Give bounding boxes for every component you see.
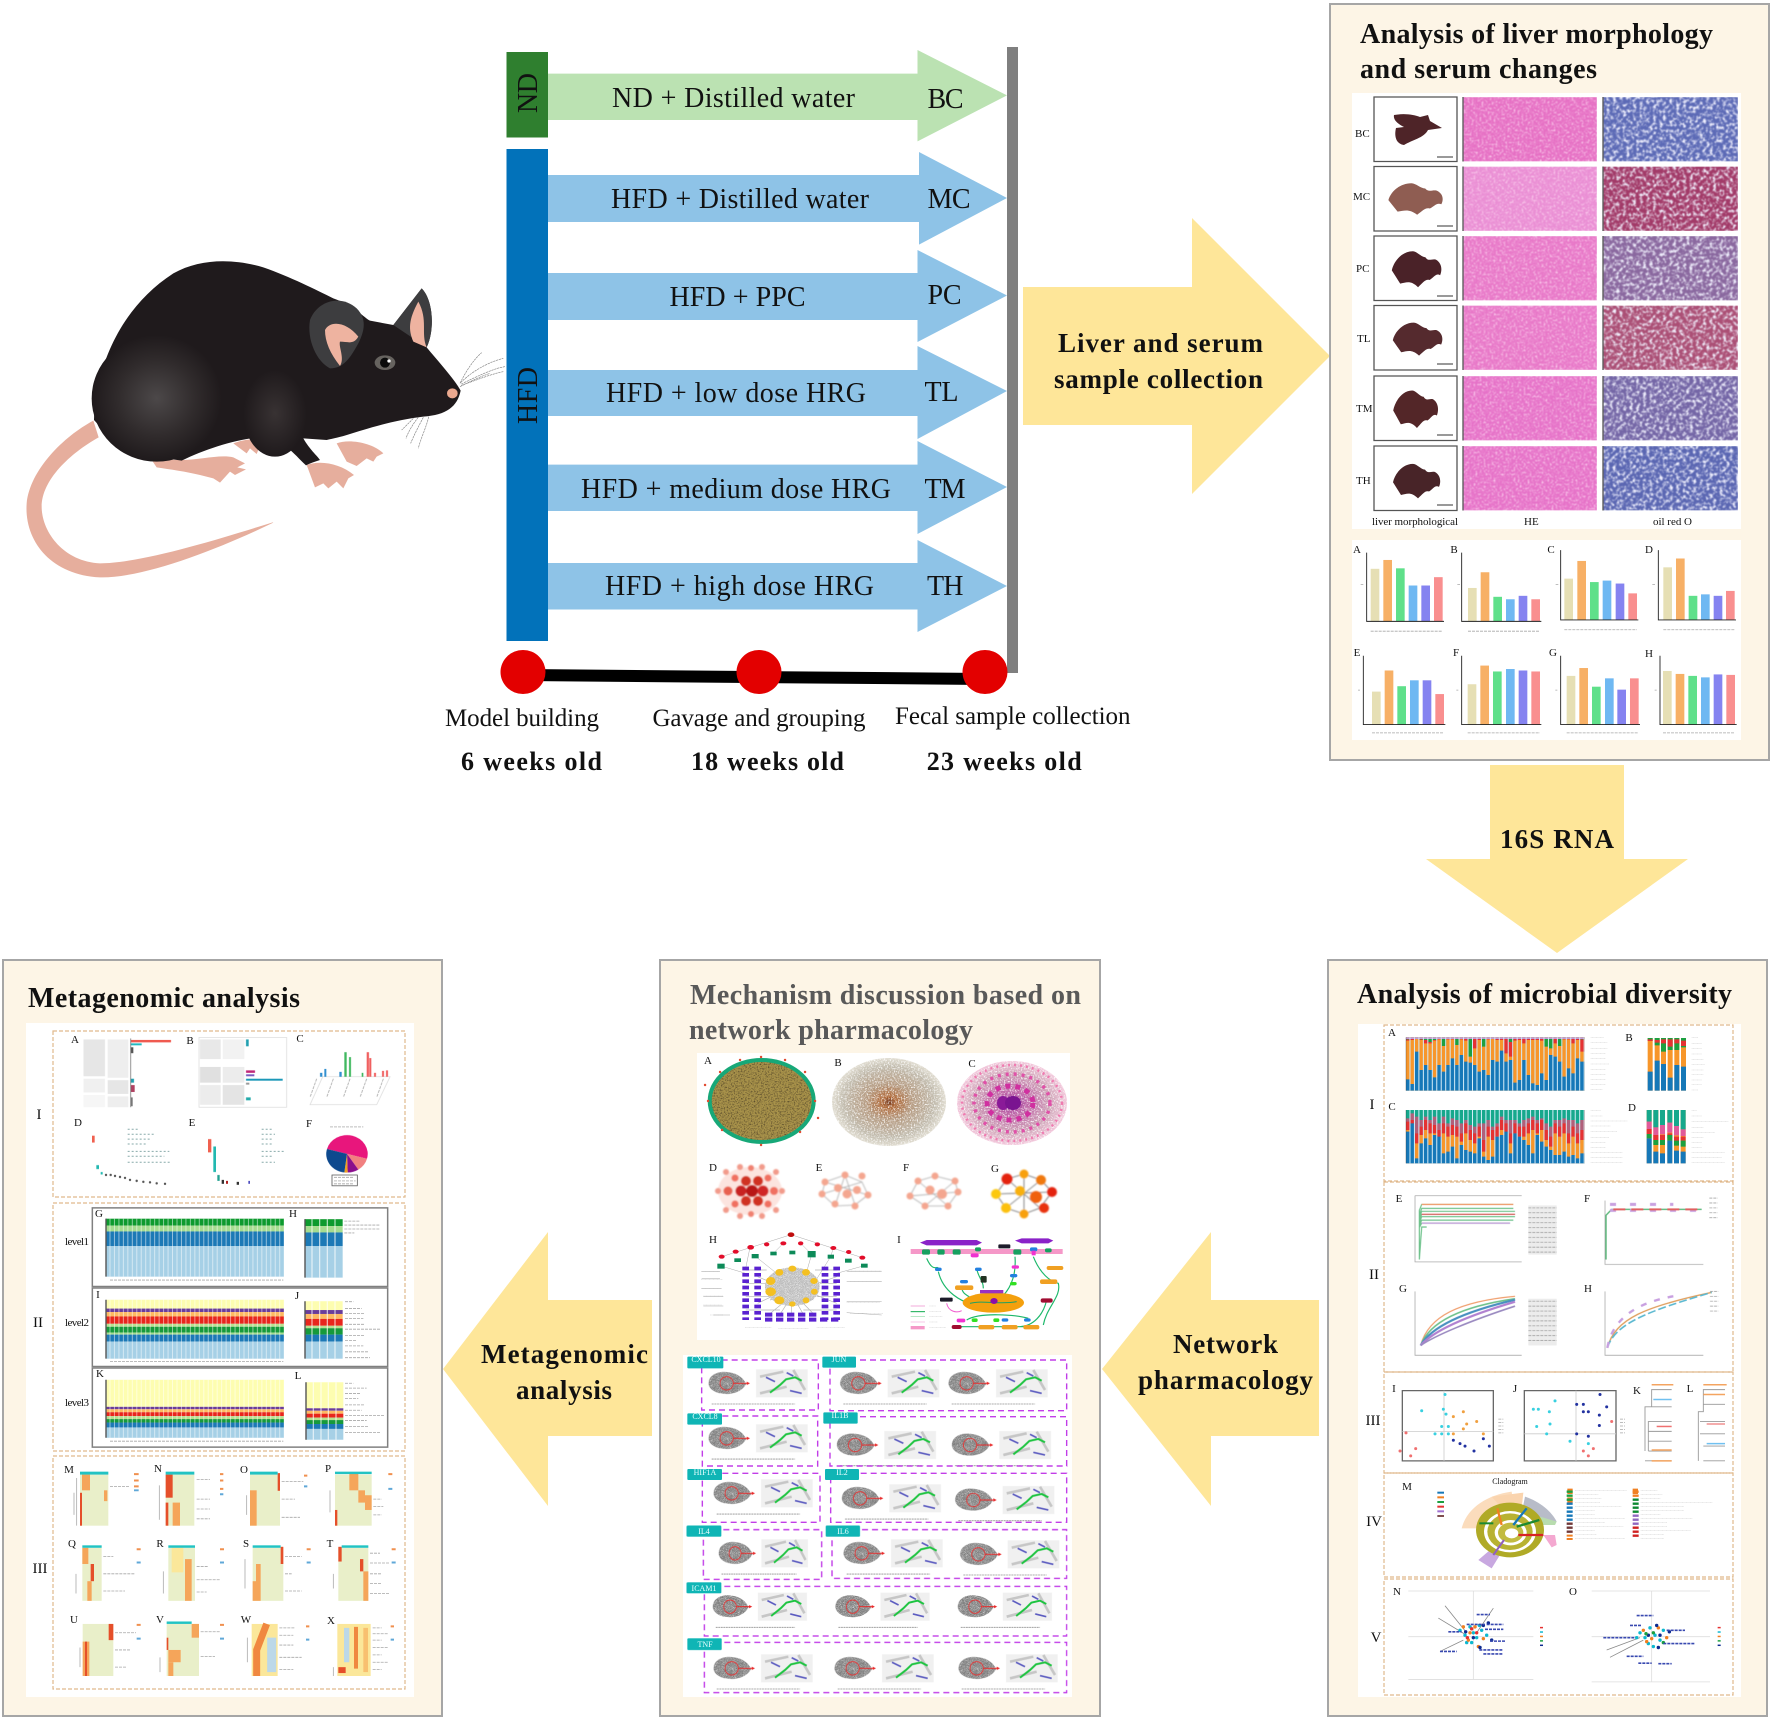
chart letters: microbial panel: L <box>1687 1383 1694 1395</box>
docking target tags rows 1-3: CXCL10 <box>691 1355 721 1364</box>
chart letters: microbial panel: G <box>1399 1283 1407 1295</box>
ordination scatter plots N and O <box>1408 1591 1721 1682</box>
section dividers <box>1384 1025 1733 1695</box>
chart letters: microbial panel: Cladogram <box>1492 1477 1529 1486</box>
chart letters: metagenomic panel: A <box>71 1034 79 1046</box>
heading: network pharmacology panel: network pharmacology <box>689 1015 973 1046</box>
chart letters: B <box>1450 544 1458 556</box>
illustration: black mouse <box>26 261 505 577</box>
arrow: HFD + high dose HRG to TH: TH <box>927 571 964 602</box>
chart letters: metagenomic panel: T <box>327 1538 334 1550</box>
section numerals <box>1366 1097 1382 1646</box>
column labels: oil red O <box>1653 516 1692 528</box>
arrow: Liver and serum sample collection <box>1023 218 1330 494</box>
arrow: 16S RNA <box>1426 765 1688 953</box>
arrow: HFD + medium dose HRG to TM: TM <box>924 474 966 505</box>
KEGG level labels: level1 <box>65 1236 89 1248</box>
histology image grid <box>1352 93 1741 529</box>
KEGG level boxes G to L <box>92 1208 388 1447</box>
section numerals: III <box>32 1561 48 1577</box>
panel: Analysis of microbial diversity <box>1328 960 1767 1716</box>
section numerals: I <box>36 1107 42 1123</box>
chart letters: metagenomic panel: N <box>154 1463 162 1475</box>
network letters: F <box>903 1162 909 1174</box>
section boxes <box>53 1031 405 1689</box>
timeline label: Gavage and grouping: Gavage and grouping <box>652 705 866 732</box>
timeline <box>500 650 1008 694</box>
section numerals: III <box>1366 1413 1380 1429</box>
rarefaction and line charts E to H <box>1415 1196 1720 1355</box>
docking target tags rows 1-3: IL2 <box>836 1468 848 1477</box>
compound-target network H <box>701 1232 883 1328</box>
chart letters: microbial panel: D <box>1628 1102 1636 1114</box>
chart letters: metagenomic panel <box>64 1033 335 1627</box>
chart letters: microbial panel: J <box>1513 1383 1518 1395</box>
arrow: HFD + PPC to PC: PC <box>928 280 962 311</box>
network letters: D <box>709 1162 717 1174</box>
docking target tags rows 1-3: IL1B <box>832 1411 848 1420</box>
docking target tags rows 4-6: IL4 <box>698 1527 710 1536</box>
panel: Mechanism discussion based on network pharmacology <box>660 960 1100 1716</box>
timeline label: Model building: Model building <box>445 705 600 732</box>
chart letters: microbial panel: C <box>1388 1101 1396 1113</box>
chart letters: metagenomic panel: R <box>156 1538 164 1550</box>
chart letters: microbial panel: H <box>1584 1283 1592 1295</box>
arrow: HFD + PPC to PC: HFD + PPC <box>670 282 806 313</box>
signalling pathway diagram I <box>911 1238 1063 1329</box>
chart letters: metagenomic panel: K <box>96 1368 104 1380</box>
row labels: TL <box>1357 333 1371 345</box>
chart letters: metagenomic panel: U <box>70 1614 78 1626</box>
heading: microbial panel: Analysis of microbial diversity <box>1357 979 1732 1010</box>
PCoA scatter plots I and J, dendrograms K and L <box>1400 1385 1727 1461</box>
KEGG level labels: level2 <box>65 1317 89 1329</box>
arrow: Metagenomic analysis: analysis <box>516 1375 612 1405</box>
diet bar: ND: ND <box>513 73 544 113</box>
chart letters: metagenomic panel: V <box>156 1614 164 1626</box>
row labels: MC <box>1353 191 1370 203</box>
chart letters: metagenomic panel: I <box>96 1289 100 1301</box>
arrow: HFD + medium dose HRG to TM: HFD + medium dose HRG <box>581 474 891 505</box>
chart letters: metagenomic panel: L <box>295 1370 302 1382</box>
heatmaps M to X <box>74 1472 396 1676</box>
chart letters: C <box>1547 544 1555 556</box>
chart letters: metagenomic panel: H <box>289 1208 297 1220</box>
section numerals: IV <box>1366 1514 1382 1530</box>
network letters: C <box>968 1058 976 1070</box>
arrow: HFD + PPC to PC <box>548 250 1007 342</box>
chart letters: metagenomic panel: D <box>74 1117 82 1129</box>
timeline label: Fecal sample collection: Fecal sample collection <box>895 703 1131 730</box>
docking target tags rows 1-3: HIF1A <box>694 1468 717 1477</box>
age label: 18 weeks old: 18 weeks old <box>691 747 845 776</box>
arrow: HFD + Distilled water to MC: HFD + Distilled water <box>611 184 870 215</box>
arrow: HFD + high dose HRG to TH <box>548 540 1007 632</box>
molecular docking rows 1-3 <box>687 1357 1067 1522</box>
section numerals: V <box>1371 1630 1382 1646</box>
docking target tags rows 4-6 <box>692 1527 849 1649</box>
chart letters: metagenomic panel: F <box>306 1118 312 1130</box>
chart letters: microbial panel: E <box>1396 1193 1403 1205</box>
endpoint bar <box>1007 47 1018 673</box>
panel: liver morphology and serum changes <box>1330 4 1769 760</box>
column labels: HE <box>1524 516 1539 528</box>
arrow: ND + Distilled water to BC: BC <box>928 84 964 115</box>
row labels: TM <box>1356 403 1373 415</box>
chart letters: metagenomic panel: X <box>327 1615 335 1627</box>
stacked bars A to D <box>1406 1037 1728 1163</box>
arrow: HFD + low dose HRG to TL: TL <box>924 377 958 408</box>
arrow: HFD + Distilled water to MC: MC <box>928 184 970 215</box>
chart letters: metagenomic panel: B <box>186 1035 194 1047</box>
chart letters: D <box>1645 544 1653 556</box>
arrow: HFD + high dose HRG to TH: HFD + high dose HRG <box>605 571 874 602</box>
arrow: 16S RNA: 16S RNA <box>1500 824 1614 854</box>
chart letters: metagenomic panel: E <box>189 1117 196 1129</box>
docking target tags rows 1-3: CXCL8 <box>692 1412 718 1421</box>
arrow: Network pharmacology <box>1102 1232 1319 1506</box>
serum bar charts A to H <box>1352 540 1741 740</box>
docking target tags rows 4-6: ICAM1 <box>692 1584 716 1593</box>
age label: 23 weeks old: 23 weeks old <box>927 747 1082 776</box>
docking target tags rows 1-3 <box>691 1355 848 1477</box>
section numerals: II <box>1369 1267 1379 1283</box>
chart letters: metagenomic panel: G <box>95 1208 103 1220</box>
row labels: PC <box>1356 263 1369 275</box>
heading: network pharmacology panel <box>689 980 1081 1046</box>
chart letters: microbial panel: N <box>1393 1586 1401 1598</box>
chart letters: microbial panel: I <box>1392 1383 1396 1395</box>
network letters: H <box>709 1234 717 1246</box>
chart letters: metagenomic panel: C <box>296 1033 304 1045</box>
column labels <box>1372 516 1692 528</box>
arrow: Network pharmacology: Network <box>1173 1329 1278 1359</box>
network letters: E <box>816 1162 823 1174</box>
network letters: G <box>991 1163 999 1175</box>
chart letters: metagenomic panel: O <box>240 1464 248 1476</box>
arrow: Network pharmacology: pharmacology <box>1138 1365 1314 1395</box>
arrow: HFD + low dose HRG to TL: HFD + low dose HRG <box>606 378 866 409</box>
chart letters: metagenomic panel: P <box>325 1463 331 1475</box>
docking target tags rows 4-6: IL6 <box>837 1527 849 1536</box>
arrow: Liver and serum sample collection: Liver and serum <box>1058 328 1264 358</box>
heading: metagenomic panel: Metagenomic analysis <box>28 983 300 1014</box>
section numerals: II <box>33 1315 43 1331</box>
heading: network pharmacology panel: Mechanism discussion based on <box>690 980 1081 1011</box>
KEGG level labels: level3 <box>65 1397 90 1409</box>
network letters <box>704 1055 999 1246</box>
row labels <box>1353 128 1373 487</box>
age label: 6 weeks old: 6 weeks old <box>461 747 603 776</box>
chart letters: microbial panel: F <box>1584 1193 1590 1205</box>
network letters: A <box>704 1055 712 1067</box>
row labels: BC <box>1355 128 1370 140</box>
diet bar: HFD: HFD <box>513 367 544 424</box>
diet bar: HFD <box>506 149 548 641</box>
cladogram M <box>1437 1489 1712 1568</box>
functional annotation charts A to F <box>83 1037 390 1186</box>
chart letters: metagenomic panel: J <box>295 1290 300 1302</box>
arrow: Metagenomic analysis <box>443 1232 652 1506</box>
arrow: HFD + low dose HRG to TL <box>548 346 1007 439</box>
heading: liver panel: and serum changes <box>1360 54 1597 85</box>
docking target tags rows 1-3: JUN <box>832 1355 847 1364</box>
chart letters: microbial panel: B <box>1625 1032 1633 1044</box>
heading: liver panel: Analysis of liver morphology <box>1360 19 1713 50</box>
molecular docking rows 4-6 <box>687 1526 1067 1693</box>
chart letters: A <box>1353 544 1361 556</box>
chart letters: G <box>1549 647 1557 659</box>
row labels: TH <box>1356 475 1371 487</box>
network letters: B <box>834 1057 842 1069</box>
section numerals: I <box>1370 1097 1374 1113</box>
arrow: ND + Distilled water to BC <box>548 50 1007 141</box>
chart letters: E <box>1354 647 1361 659</box>
chart letters: metagenomic panel: M <box>64 1464 74 1476</box>
section numerals <box>32 1107 48 1577</box>
network diagrams D to G <box>715 1164 1057 1219</box>
chart letters: microbial panel: A <box>1388 1027 1396 1039</box>
network letters: I <box>897 1234 901 1246</box>
KEGG level labels <box>65 1236 90 1409</box>
panel: Metagenomic analysis <box>3 960 442 1716</box>
chart letters: microbial panel <box>1388 1027 1694 1598</box>
arrow: Metagenomic analysis: Metagenomic <box>481 1339 648 1369</box>
heading: liver panel <box>1360 19 1713 85</box>
chart letters: metagenomic panel: Q <box>68 1538 76 1550</box>
chart letters: microbial panel: K <box>1633 1385 1641 1397</box>
chart letters: microbial panel: M <box>1402 1481 1412 1493</box>
chart letters: H <box>1645 648 1653 660</box>
chart letters: metagenomic panel: W <box>241 1614 252 1626</box>
column labels: liver morphological <box>1372 516 1458 528</box>
chart letters: F <box>1453 647 1459 659</box>
arrow: HFD + Distilled water to MC <box>548 152 1007 245</box>
chart letters: metagenomic panel: S <box>243 1538 249 1550</box>
chart letters <box>1353 544 1653 660</box>
chart letters: microbial panel: O <box>1569 1586 1577 1598</box>
arrow: HFD + medium dose HRG to TM <box>548 441 1007 534</box>
arrow: ND + Distilled water to BC: ND + Distilled water <box>612 83 856 114</box>
network diagrams A to C <box>705 1057 1067 1146</box>
docking target tags rows 4-6: TNF <box>697 1640 713 1649</box>
diet bar: ND <box>506 52 548 138</box>
arrow: Liver and serum sample collection: sample collection <box>1054 364 1263 394</box>
